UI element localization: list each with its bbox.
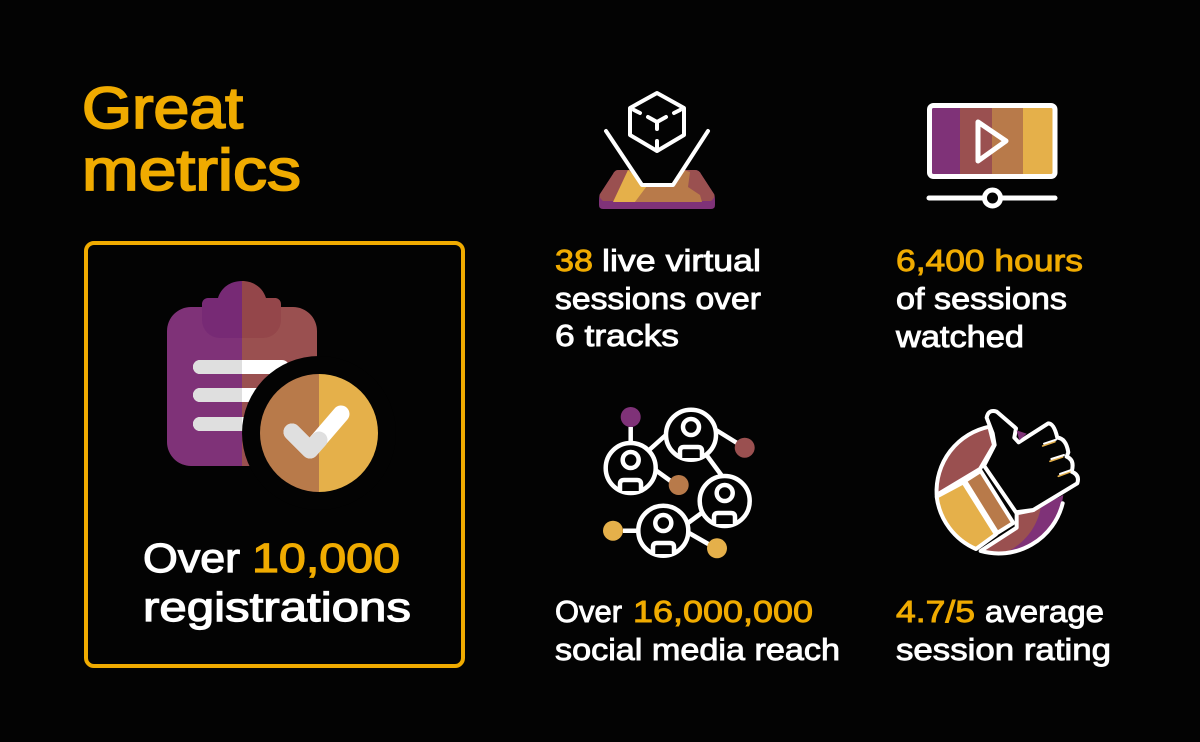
text: session rating: session rating: [896, 633, 1111, 667]
registrations text: [143, 535, 411, 630]
text: social media reach: 16,000,000: [633, 595, 813, 629]
text: social media reach: [555, 595, 840, 667]
registrations text: Over: [143, 535, 240, 581]
text: live virtual sessions: 6 tracks: [555, 319, 679, 353]
text: hours watched: of sessions: [896, 282, 1067, 316]
title: metrics: [82, 138, 301, 203]
text: social media reach: Over: [555, 595, 622, 629]
text: social media reach: social media reach: [555, 633, 840, 667]
title: [82, 76, 301, 203]
icon: hologram cube over tablet: [599, 93, 715, 209]
text: live virtual sessions: 38: [555, 244, 593, 278]
text: session rating: 4.7/5: [896, 595, 975, 629]
title: Great: [82, 76, 243, 141]
registrations text: registrations: [143, 584, 411, 630]
icon: thumbs up: [937, 411, 1078, 554]
registrations text: 10,000: [252, 535, 400, 581]
text: session rating: [896, 595, 1111, 667]
text: hours watched: 6,400 hours: [896, 244, 1083, 278]
text: live virtual sessions: live virtual: [602, 244, 761, 278]
text: live virtual sessions: [555, 244, 761, 353]
text: hours watched: [895, 244, 1083, 354]
icon: video player: [929, 106, 1055, 206]
panel: registrations: [86, 243, 463, 666]
text: hours watched: watched: [895, 320, 1024, 354]
icon: social network of people: [603, 407, 755, 558]
text: session rating: average: [985, 595, 1104, 629]
text: live virtual sessions: sessions over: [555, 282, 761, 316]
icon: clipboard with check mark: [167, 281, 396, 510]
